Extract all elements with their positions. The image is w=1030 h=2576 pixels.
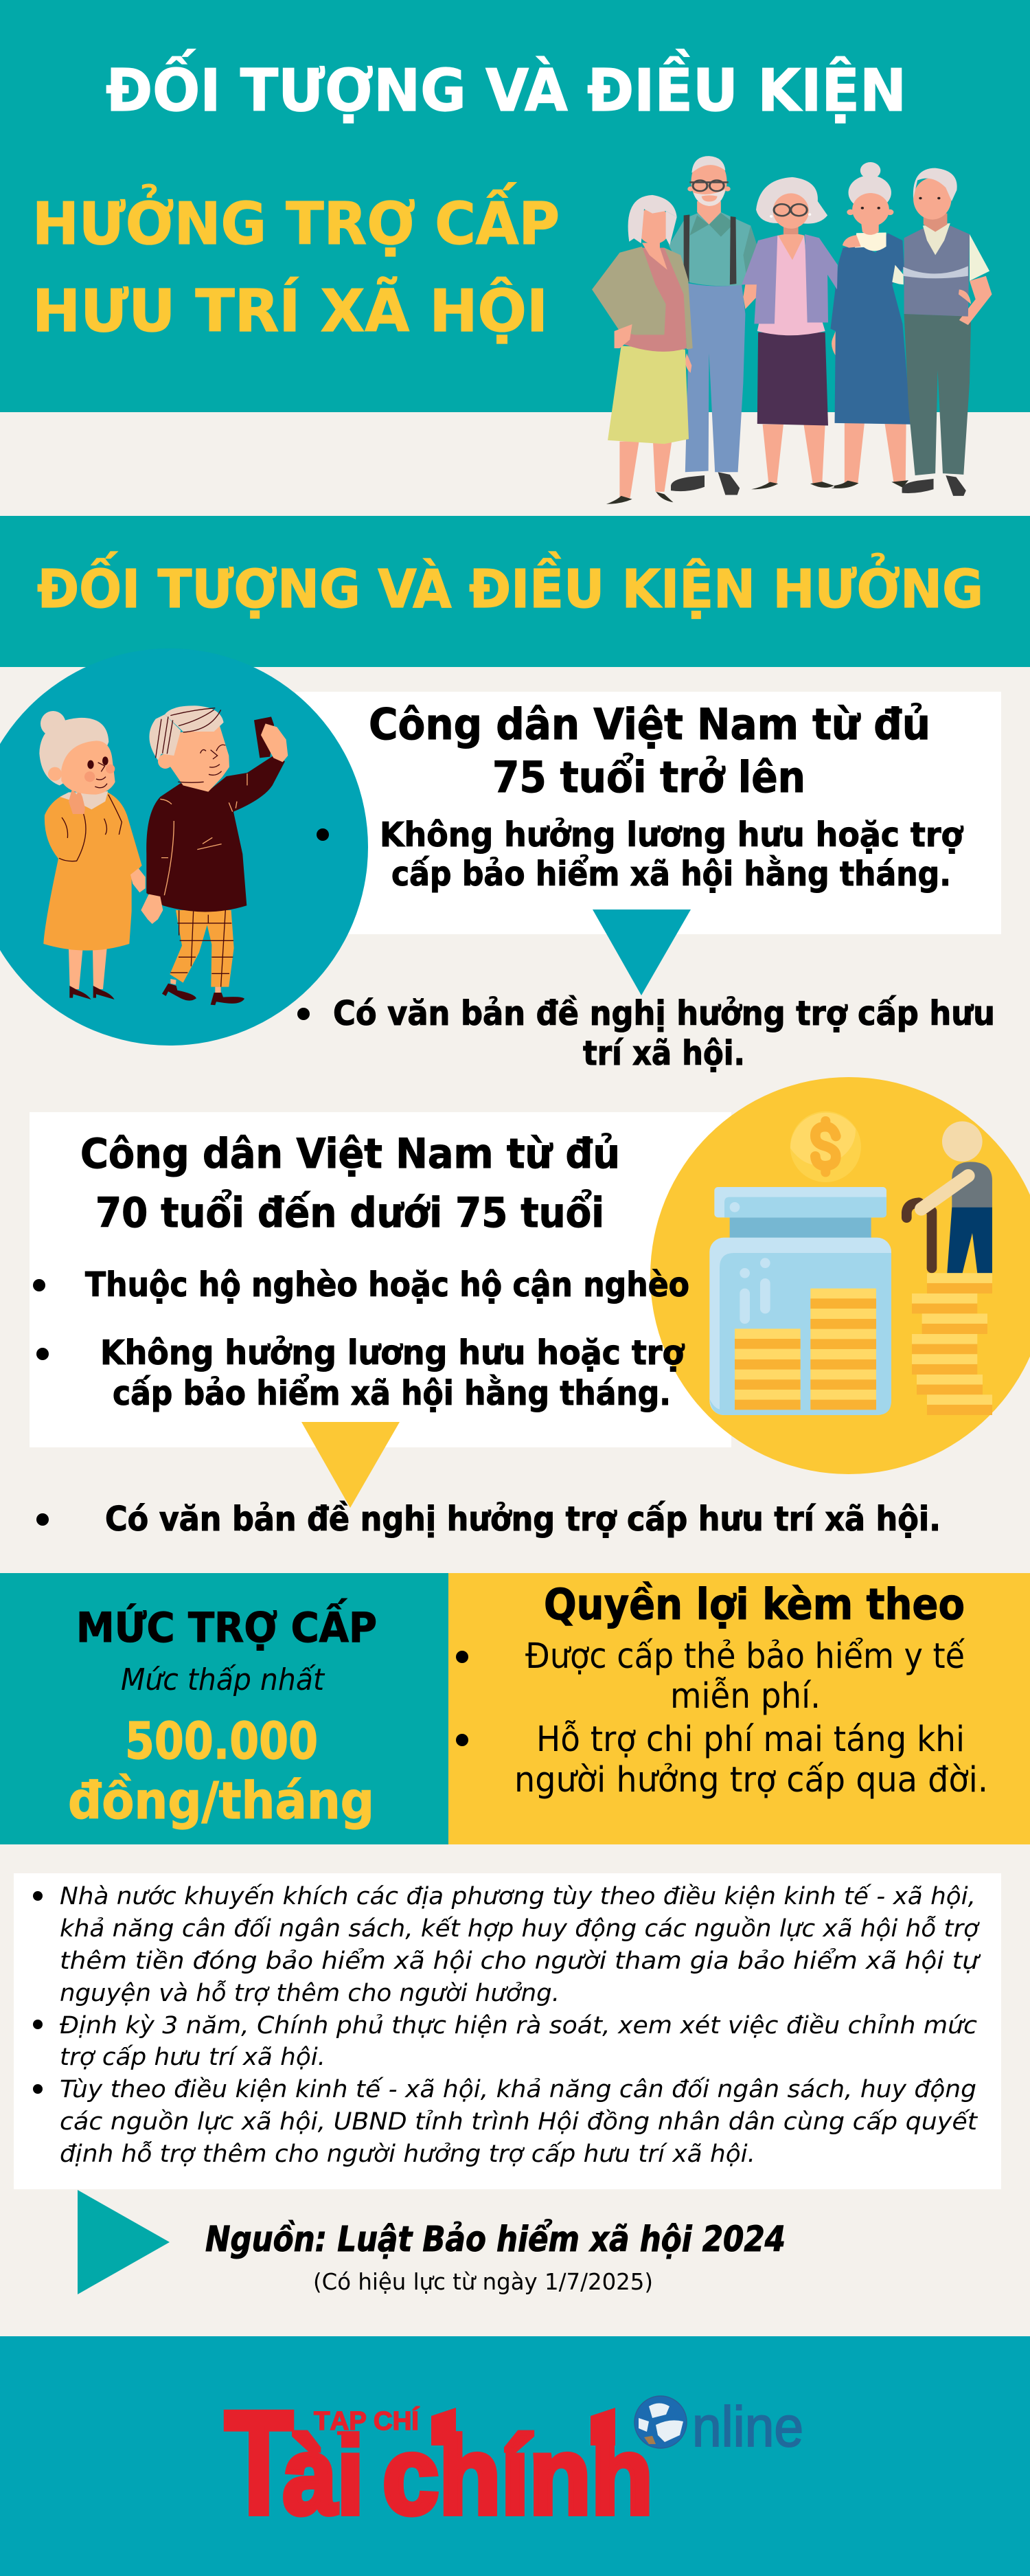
panel: accompanying benefits (448, 1573, 1030, 1844)
logo wordmark: chính (382, 2414, 653, 2537)
panel: policy notes (14, 1873, 1001, 2189)
condition: no pension, line 1: Không hưởng lương hưu hoặc trợ (100, 1333, 685, 1372)
teal background (0, 1573, 448, 1844)
person: woman in olive cardigan and yellow skirt (592, 195, 693, 504)
logo wordmark: ài (283, 2414, 364, 2537)
heading: 75 and over, line 2: 75 tuổi trở lên (492, 752, 805, 802)
white card (14, 1873, 1001, 2189)
person: woman in blue dress (830, 162, 911, 488)
title: line 2: HƯỞNG TRỢ CẤP (32, 181, 560, 258)
benefit: funeral support, line 2: người hưởng trợ cấp qua đời. (514, 1760, 988, 1800)
logo wordmark: T (225, 2381, 293, 2545)
note 1: thêm tiền đóng bảo hiểm xã hội cho người tham gia bảo hiểm xã hội tự (60, 1947, 981, 1975)
bullet dot (36, 1513, 49, 1526)
heading: 70 to under 75, line 1: Công dân Việt Nam từ đủ (80, 1130, 620, 1178)
logo: magazine label: TẠP CHÍ (314, 2406, 420, 2436)
coin stacks in jar (735, 1289, 876, 1410)
benefit: health insurance, line 1: Được cấp thẻ bảo hiểm y tế (525, 1636, 965, 1677)
benefit: health insurance, line 2: miễn phí. (670, 1676, 821, 1717)
yellow background (448, 1573, 1030, 1844)
arrow: yellow down triangle (301, 1422, 400, 1508)
condition: written request, line 1: Có văn bản đề nghị hưởng trợ cấp hưu (333, 994, 995, 1033)
note 2: trợ cấp hưu trí xã hội. (60, 2044, 325, 2071)
heading: 75 and over, line 1: Công dân Việt Nam từ đủ (369, 699, 930, 749)
illustration: couple taking a selfie (39, 705, 288, 1005)
white card (30, 1112, 731, 1447)
heading: 70 to under 75, line 2: 70 tuổi đến dưới 75 tuổi (95, 1188, 604, 1237)
note 1: nguyện và hỗ trợ thêm cho người hưởng. (60, 1980, 560, 2007)
heading: benefit level: MỨC TRỢ CẤP (76, 1598, 377, 1652)
circle background (0, 648, 368, 1046)
person: man in striped vest (902, 168, 992, 496)
illustration: savings jar and elderly man on coins (709, 1111, 992, 1415)
person: tall man with glasses (669, 156, 764, 495)
note 1: Nhà nước khuyến khích các địa phương tùy theo điều kiện kinh tế - xã hội, (60, 1883, 976, 1910)
benefit: funeral support, line 1: Hỗ trợ chi phí mai táng khi (536, 1719, 965, 1760)
amount: 500.000 (125, 1712, 318, 1771)
note 1: khả năng cân đối ngân sách, kết hợp huy động các nguồn lực xã hội hỗ trợ (60, 1915, 980, 1943)
note 3: định hỗ trợ thêm cho người hưởng trợ cấp hưu trí xã hội. (60, 2140, 755, 2168)
white card (295, 692, 1001, 934)
condition: poor household: Thuộc hộ nghèo hoặc hộ cận nghèo (85, 1265, 689, 1304)
section heading: ĐỐI TƯỢNG VÀ ĐIỀU KIỆN HƯỞNG (37, 552, 983, 620)
arrow: teal down triangle (593, 909, 691, 995)
panel: citizens aged 75 and over (0, 648, 1001, 1073)
unit: đồng/tháng (68, 1772, 374, 1831)
panel: citizens aged 70 to under 75 (30, 1077, 1030, 1539)
condition: written request: Có văn bản đề nghị hưởng trợ cấp hưu trí xã hội. (105, 1500, 941, 1539)
logo: Tài chính Online (225, 2381, 803, 2545)
note 1 (33, 1883, 981, 2007)
note 3: Tùy theo điều kiện kinh tế - xã hội, khả năng cân đối ngân sách, huy động (60, 2076, 976, 2103)
jar (709, 1187, 891, 1415)
section heading band (0, 516, 1030, 667)
logo: online text: nline (692, 2395, 803, 2459)
source line: Nguồn: Luật Bảo hiểm xã hội 2024 (205, 2218, 786, 2260)
note 2 (33, 2012, 977, 2071)
bullet dot (317, 828, 329, 841)
coin staircase (912, 1273, 992, 1415)
bullet dot (297, 1008, 310, 1020)
effective date: (Có hiệu lực từ ngày 1/7/2025) (313, 2268, 653, 2295)
circle background (650, 1077, 1030, 1474)
arrow: teal right triangle (78, 2190, 170, 2294)
bullet dot (36, 1348, 49, 1360)
person: woman in lilac cardigan (742, 177, 858, 489)
panel: benefit amount (0, 1573, 448, 1844)
header band (0, 0, 1030, 412)
condition: no pension, line 2: cấp bảo hiểm xã hội hằng tháng. (113, 1373, 671, 1413)
subheading: minimum: Mức thấp nhất (121, 1662, 325, 1697)
condition: no pension, line 2: cấp bảo hiểm xã hội hằng tháng. (391, 854, 951, 894)
logo: globe (634, 2396, 687, 2448)
title: line 3: HƯU TRÍ XÃ HỘI (32, 276, 548, 346)
illustration: five elderly people (592, 156, 992, 504)
heading: benefits: Quyền lợi kèm theo (544, 1579, 965, 1629)
logo wordmark (225, 2381, 653, 2545)
bullet dot (456, 1734, 468, 1746)
woman (39, 711, 146, 999)
elderly man with cane (906, 1121, 992, 1273)
footer band (0, 2336, 1030, 2576)
bullet dot (456, 1651, 468, 1663)
note 3: các nguồn lực xã hội, UBND tỉnh trình Hội đồng nhân dân cùng cấp quyết (60, 2108, 978, 2136)
condition: no pension, line 1: Không hưởng lương hưu hoặc trợ (380, 815, 964, 855)
man (141, 705, 288, 1005)
note 3 (33, 2076, 978, 2168)
condition: written request, line 2: trí xã hội. (583, 1034, 745, 1073)
coin with dollar sign (790, 1111, 861, 1182)
note 2: Định kỳ 3 năm, Chính phủ thực hiện rà soát, xem xét việc điều chỉnh mức (60, 2012, 977, 2040)
bullet dot (33, 1279, 45, 1291)
title: line 1: ĐỐI TƯỢNG VÀ ĐIỀU KIỆN (106, 48, 906, 125)
